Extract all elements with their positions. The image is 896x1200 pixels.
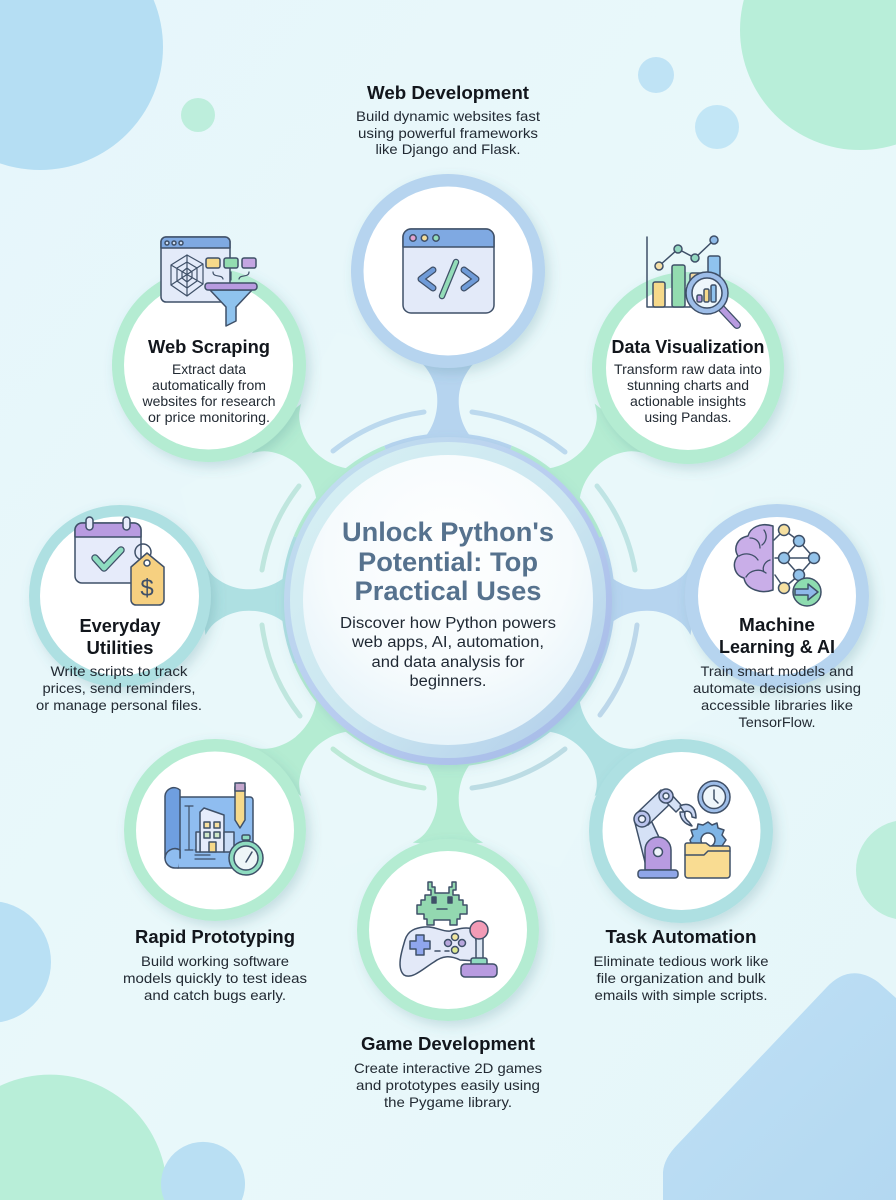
subtitle: web apps, AI, automation, — [351, 634, 544, 651]
text: data visualization: stunning charts and — [627, 377, 749, 393]
text: machine learning and AI — [693, 663, 861, 730]
heading: web development: Web Development — [367, 83, 529, 103]
icon: blueprint and stopwatch — [165, 783, 263, 875]
hub connectors — [203, 355, 693, 845]
text: task automation: file organization and bulk — [596, 970, 767, 986]
heading: rapid prototyping: Rapid Prototyping — [135, 927, 295, 947]
text: everyday utilities: or manage personal files. — [36, 697, 202, 713]
heading: everyday utilities: Utilities — [86, 638, 154, 658]
text: web development — [356, 108, 540, 157]
text: rapid prototyping: Build working software — [141, 953, 289, 969]
text: data visualization — [614, 361, 762, 425]
text: web scraping: Extract data — [172, 361, 246, 377]
text: data visualization: Transform raw data into — [614, 361, 762, 377]
main title — [342, 517, 554, 606]
text: rapid prototyping: and catch bugs early. — [144, 987, 286, 1003]
pale petals between connectors — [153, 305, 743, 895]
heading: data visualization: Data Visualization — [612, 337, 764, 357]
text: web scraping — [142, 361, 276, 425]
icon: calendar and price tag: $ — [140, 575, 154, 602]
heading: machine learning and AI: Learning & AI — [719, 637, 835, 657]
text: rapid prototyping — [123, 953, 307, 1003]
subtitle — [340, 615, 556, 690]
text: web scraping: websites for research — [142, 393, 276, 409]
panel: web scraping — [112, 237, 306, 462]
panel: everyday utilities — [29, 505, 211, 713]
heading: machine learning and AI — [719, 615, 835, 657]
text: web development: using powerful frameworks — [358, 125, 538, 141]
panel: data visualization — [592, 236, 784, 464]
text: web development: like Django and Flask. — [376, 141, 520, 157]
heading: task automation: Task Automation — [606, 927, 756, 947]
text: data visualization: using Pandas. — [644, 409, 732, 425]
panel: web development — [351, 83, 545, 368]
panel: machine learning and AI — [685, 504, 869, 730]
text: game development — [354, 1060, 542, 1110]
text: machine learning and AI: accessible libraries like — [701, 697, 853, 713]
hub: central circle — [284, 437, 612, 765]
icon: robot arm, clock, gear and folder — [634, 781, 730, 878]
panel: rapid prototyping — [123, 739, 307, 1003]
text: web development: Build dynamic websites fast — [356, 108, 540, 124]
text: task automation: emails with simple scripts. — [594, 987, 768, 1003]
heading: machine learning and AI: Machine — [739, 615, 815, 635]
text: machine learning and AI: Train smart models and — [700, 663, 854, 679]
icon: alien and game controller — [400, 882, 497, 977]
panel: task automation — [589, 739, 773, 1003]
heading: everyday utilities — [80, 616, 160, 658]
subtitle: Discover how Python powers — [340, 615, 556, 632]
icon: web scraping funnel — [161, 237, 257, 326]
text: game development: and prototypes easily using — [356, 1077, 540, 1093]
heading: web scraping: Web Scraping — [148, 337, 270, 357]
text: web scraping: automatically from — [152, 377, 266, 393]
text: everyday utilities — [36, 663, 202, 713]
heading: everyday utilities: Everyday — [80, 616, 160, 636]
text: rapid prototyping: models quickly to test ideas — [123, 970, 307, 986]
heading: game development: Game Development — [361, 1034, 535, 1054]
panel: game development — [354, 839, 542, 1110]
text: machine learning and AI: TensorFlow. — [738, 714, 816, 730]
main title: Unlock Python's — [342, 517, 554, 547]
text: machine learning and AI: automate decisions using — [693, 680, 861, 696]
text: task automation — [594, 953, 769, 1003]
text: web scraping: or price monitoring. — [148, 409, 270, 425]
arcs around hub — [262, 412, 637, 788]
text: data visualization: actionable insights — [630, 393, 746, 409]
icon: calendar and price tag — [75, 517, 164, 605]
text: game development: the Pygame library. — [384, 1094, 512, 1110]
subtitle: and data analysis for — [372, 654, 524, 671]
icon: chart and magnifier — [647, 236, 737, 325]
text: task automation: Eliminate tedious work like — [594, 953, 769, 969]
text: game development: Create interactive 2D games — [354, 1060, 542, 1076]
text: everyday utilities: Write scripts to track — [50, 663, 189, 679]
icon: brain and network — [734, 524, 821, 606]
subtitle: beginners. — [410, 673, 486, 690]
text: everyday utilities: prices, send reminders, — [42, 680, 196, 696]
icon: code window — [403, 229, 494, 313]
main title: Practical Uses — [354, 576, 542, 606]
main title: Potential: Top — [358, 547, 538, 577]
